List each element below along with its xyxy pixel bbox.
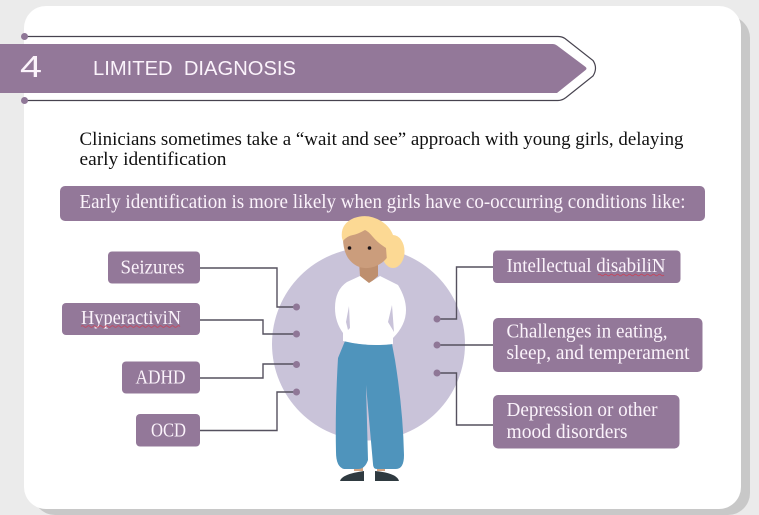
subheading bar: Early identification is more likely when girls have co-occurring conditions like: [80,192,686,213]
face [343,226,392,268]
eyes [348,246,371,250]
label: OCD: OCD [151,420,186,442]
intro text: early identification [80,149,227,170]
label: OCD [136,414,200,446]
banner outline end dots [21,33,28,104]
label: Intellectual disability [493,250,680,283]
trousers [336,341,404,469]
label: Depression or other mood disorders: Depression or other [506,400,658,421]
sweater [335,276,406,345]
section title: LIMITED DIAGNOSIS [93,57,296,80]
header banner [0,33,596,104]
subheading bar [60,186,705,221]
label: Hyperactivity: HyperactiviN [81,308,181,329]
figure: girl [335,216,406,481]
hair bun [382,235,404,268]
banner outline [24,36,596,100]
hair [342,216,394,261]
label: Challenges in eating, sleep, and temperament: Challenges in eating, [506,322,668,342]
label: ADHD: ADHD [136,368,186,388]
banner ribbon [0,44,586,93]
neck [359,262,378,284]
label: Depression or other mood disorders: mood disorders [506,422,628,443]
sleeve creases [346,305,394,332]
label: Depression or other mood disorders [493,395,680,448]
label: Challenges in eating, sleep, and temperament: sleep, and temperament [506,343,690,364]
label: Seizures: Seizures [120,258,184,278]
intro text: Clinicians sometimes take a “wait and see” approach with young girls, delaying [80,129,684,150]
background circle [272,248,465,440]
label: ADHD [122,362,200,394]
label: Intellectual disability: Intellectual disabiliN [506,256,666,277]
section number: 4 [20,49,42,84]
label: Hyperactivity [62,303,200,335]
connector dots [293,304,440,396]
ankles [354,467,385,471]
connector lines [200,267,493,430]
label: Challenges in eating, sleep, and temperament [493,318,702,372]
shoes [340,471,399,481]
label: Seizures [108,252,200,284]
